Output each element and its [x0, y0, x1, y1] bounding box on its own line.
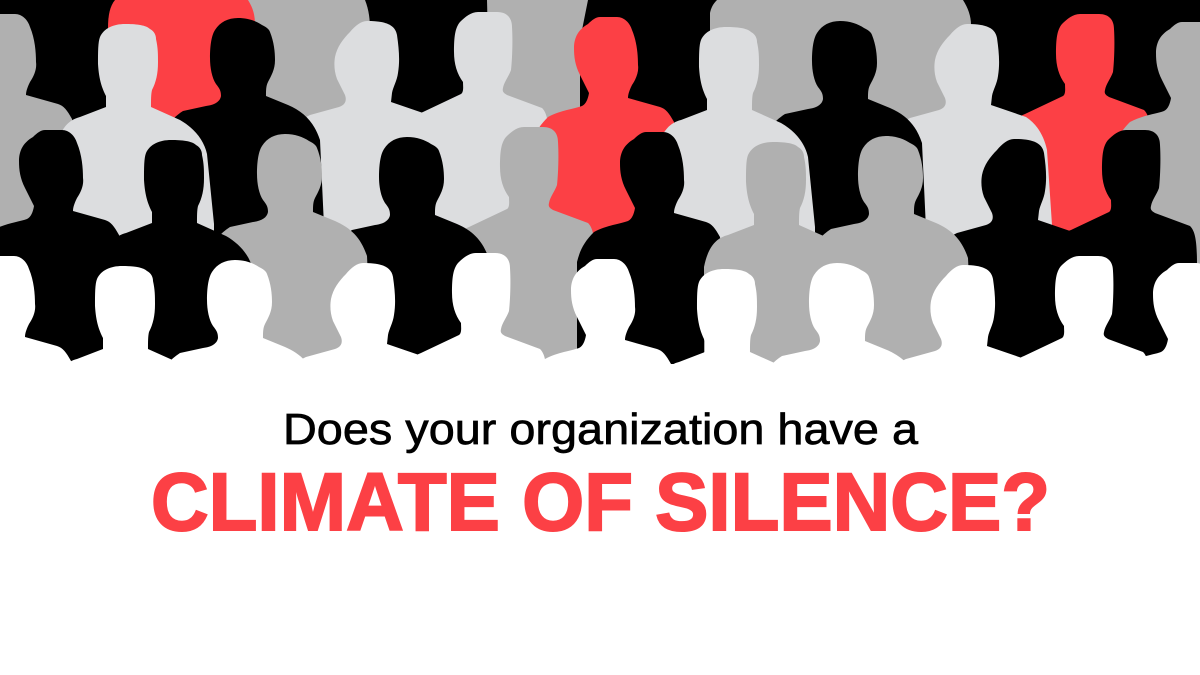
white figure: [401, 253, 548, 583]
gray figure right edge: [1113, 22, 1200, 352]
white figure: [528, 259, 683, 589]
white figure: [0, 256, 83, 586]
gray trapezoid body back row: [487, 0, 588, 125]
black figure: [0, 130, 131, 460]
black figure: [160, 18, 324, 348]
front row of white figures: [0, 253, 1200, 599]
light figure: [882, 24, 1052, 354]
white figure: [655, 269, 813, 599]
white figure: [759, 263, 923, 593]
white figure: [278, 263, 448, 593]
black figure: [1051, 130, 1198, 460]
gray figure: [207, 134, 371, 464]
black figure: [929, 139, 1099, 469]
black figure: [329, 137, 493, 467]
light figure: [282, 21, 452, 351]
gray figure: [704, 142, 862, 472]
white figure: [53, 266, 211, 596]
gray figure: [808, 136, 972, 466]
white lower area: [0, 364, 1200, 675]
red body back row: [108, 0, 255, 135]
white figure: [878, 265, 1048, 595]
white figure: [1110, 263, 1200, 593]
red figure right: [1005, 14, 1152, 344]
gray body back row: [240, 0, 370, 135]
heading line: Does your organization have a: [283, 405, 919, 454]
crowd backdrop: [0, 0, 1200, 365]
light figure: [403, 12, 550, 342]
black figure: [102, 140, 260, 470]
white figure: [157, 260, 321, 590]
wide gray body back row: [710, 0, 971, 135]
red figure: [531, 17, 686, 347]
black figure: [577, 132, 732, 462]
second row of figures: [0, 12, 1200, 357]
gray figure left edge: [0, 14, 84, 344]
light figure: [56, 24, 214, 354]
main title: CLIMATE OF SILENCE?: [151, 457, 1050, 548]
third row of figures: [0, 127, 1198, 472]
light figure: [657, 27, 815, 357]
gray figure: [449, 127, 596, 457]
back row of cropped bodies: [108, 0, 971, 135]
white figure: [1004, 256, 1151, 586]
black figure: [762, 21, 926, 351]
